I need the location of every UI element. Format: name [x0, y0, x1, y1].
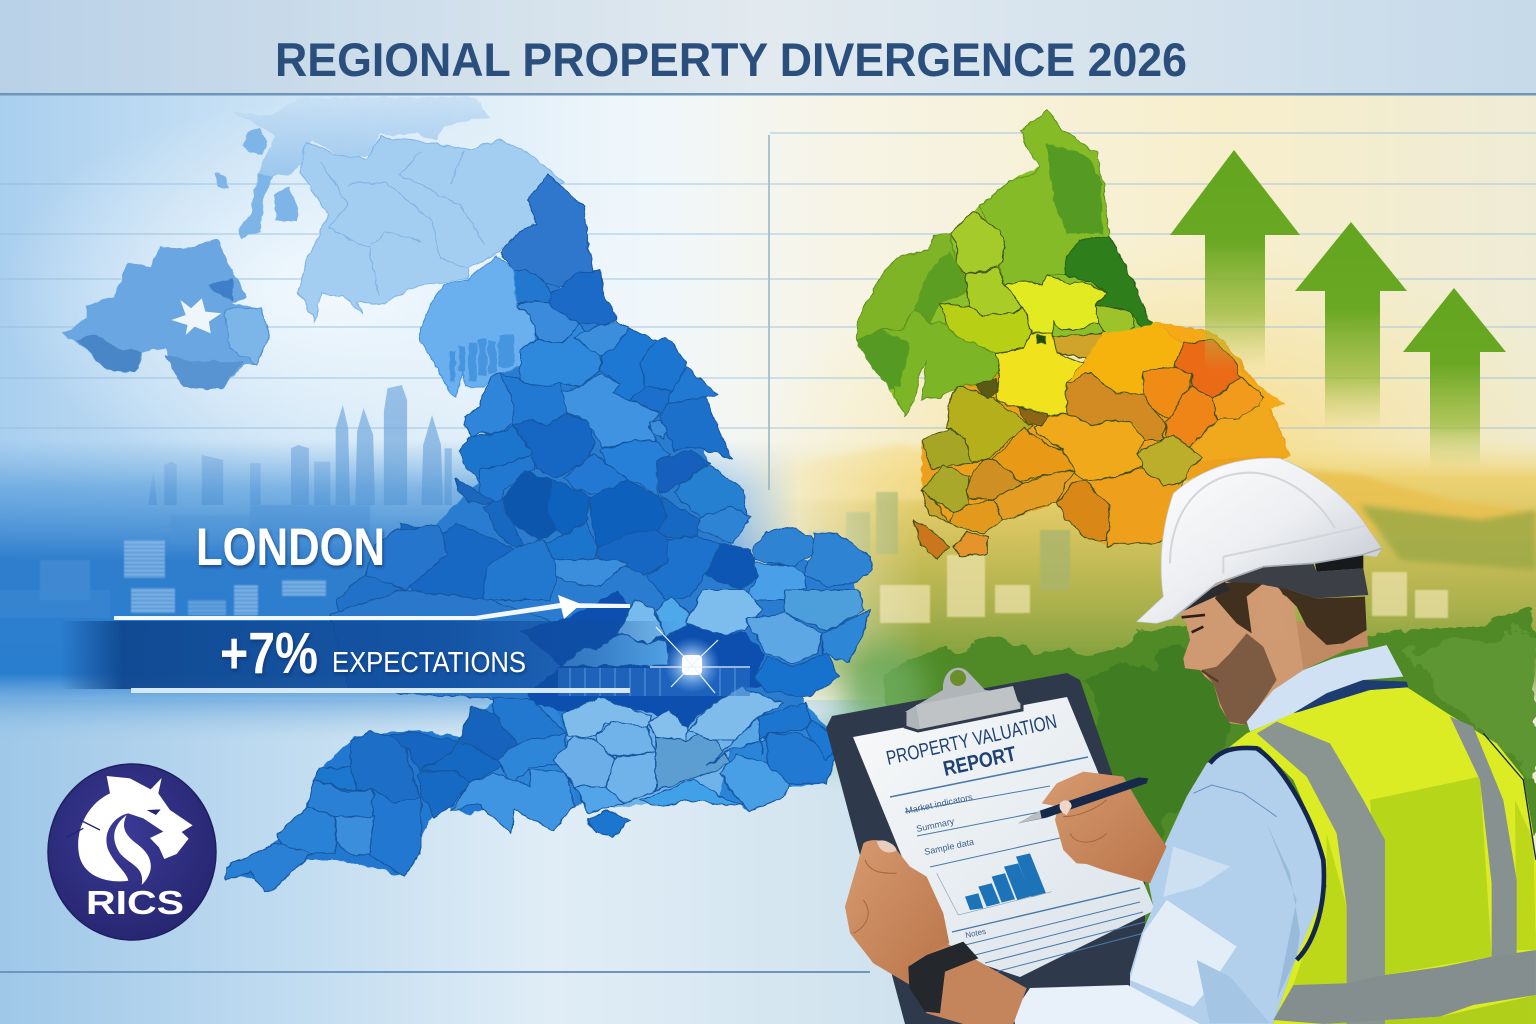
report labels: Summary — [915, 816, 956, 834]
trees, right foreground — [885, 615, 1536, 1024]
title rule — [0, 93, 1536, 96]
hands — [845, 772, 1167, 1024]
eye and brow — [1182, 615, 1205, 632]
grid lines — [0, 133, 1536, 490]
London city scene — [0, 385, 800, 740]
surveyor — [845, 458, 1536, 1024]
header band — [0, 0, 1536, 95]
map: Northern Ireland — [62, 238, 270, 390]
vest trim — [1210, 748, 1324, 960]
report labels — [904, 792, 987, 940]
map base fill — [235, 260, 860, 880]
hard hat strap — [1225, 563, 1368, 598]
report labels: Notes — [965, 927, 987, 940]
city blocks — [0, 505, 370, 618]
RICS logo — [48, 764, 216, 940]
collar — [1247, 645, 1403, 732]
beard — [1202, 633, 1277, 725]
cuff — [1013, 985, 1200, 1024]
clipboard — [826, 668, 1155, 1024]
label: London: LONDON — [196, 518, 385, 577]
reflective strips — [1257, 722, 1385, 1024]
RICS logo: RICS — [86, 884, 184, 921]
lower rule — [131, 688, 630, 693]
pen — [1018, 777, 1148, 823]
mouth — [1202, 671, 1218, 682]
skyline towers — [148, 385, 452, 505]
map: Scotland and islands — [216, 97, 564, 322]
report lines — [890, 757, 1148, 972]
left hand — [845, 840, 949, 984]
report labels: Market indicators — [904, 792, 974, 816]
bottom rule — [0, 971, 870, 973]
southern counties — [226, 590, 869, 892]
report sheet — [853, 697, 1155, 977]
London chart strip — [558, 668, 750, 696]
clip — [905, 668, 1022, 731]
hard hat shell — [1137, 458, 1382, 623]
ear — [1257, 585, 1287, 642]
tree transition to blue — [815, 645, 925, 770]
map: England and Wales, blue — [226, 175, 873, 892]
head — [1137, 458, 1408, 732]
shirt body — [1130, 747, 1325, 1024]
stat: +7% expectations: +7% — [220, 621, 318, 686]
stat: +7% expectations: EXPECTATIONS — [332, 647, 526, 679]
growth arrow: medium — [1295, 222, 1407, 430]
northern and midland counties — [400, 175, 873, 600]
watch — [908, 942, 978, 1013]
Lough Neagh highlight — [171, 298, 221, 335]
growth arrow: large — [1170, 150, 1300, 370]
welsh border counties — [330, 525, 600, 700]
right city and landscape — [700, 440, 1536, 710]
right hand — [1042, 772, 1167, 883]
report bar chart — [937, 853, 1052, 915]
neck — [1230, 617, 1368, 725]
clipboard: REPORT — [941, 742, 1018, 781]
map: northern England, green to orange — [857, 110, 1290, 558]
left forearm — [908, 943, 1027, 1024]
growth arrow: small — [1403, 288, 1506, 470]
face — [1180, 577, 1303, 725]
safety vest — [1210, 687, 1536, 1024]
report labels: Sample data — [923, 837, 975, 857]
arrow line to London — [114, 595, 630, 620]
hair — [1215, 577, 1367, 645]
report title: PROPERTY VALUATION — [884, 711, 1059, 770]
London location glow — [650, 627, 750, 693]
lion emblem — [67, 776, 193, 885]
London band — [60, 621, 680, 689]
stat: +7% expectations — [220, 621, 526, 686]
title: REGIONAL PROPERTY DIVERGENCE 2026 — [275, 33, 1187, 86]
